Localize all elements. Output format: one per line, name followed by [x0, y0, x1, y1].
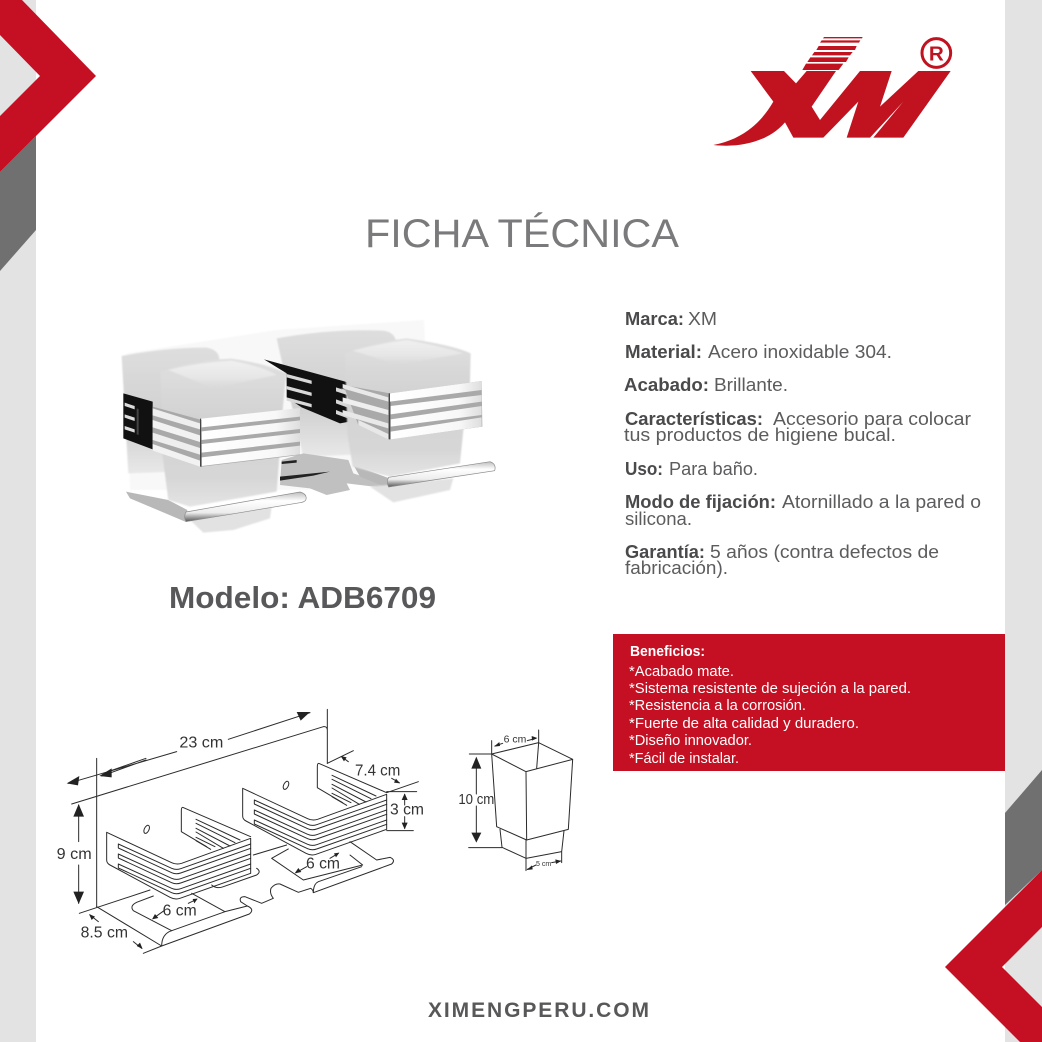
cup labels: 10 cm: [458, 792, 494, 808]
spec: garantia: fabricación).: [625, 558, 728, 578]
spec: modo de fijacion: [625, 492, 981, 529]
logo registered mark: R: [929, 42, 944, 65]
spec: marca: [625, 309, 717, 329]
cup labels: 5 cm: [536, 859, 551, 868]
dimension drawing: cup: [458, 730, 573, 871]
spec: caracteristicas: Accesorio para colocar: [773, 409, 971, 429]
dimension arrows: [68, 713, 418, 948]
spec: acabado: Acabado:: [624, 375, 709, 395]
product photo: [122, 320, 495, 533]
cup arrows: [476, 738, 561, 869]
spec: garantia: 5 años (contra defectos de: [710, 542, 939, 562]
front left cup bottom: [190, 507, 272, 533]
arrow heads: [67, 712, 408, 949]
dimension labels: 8.5 cm: [81, 925, 128, 942]
title: FICHA TÉCNICA: [365, 211, 679, 256]
left decorative strip: [0, 0, 96, 1042]
logo: XM: [713, 37, 951, 146]
benefits list: *Fuerte de alta calidad y duradero.: [629, 716, 859, 732]
cup labels: 6 cm: [504, 735, 526, 746]
logo registered mark: [922, 39, 951, 67]
spec: marca: XM: [688, 309, 717, 329]
bottom shelf: [79, 842, 393, 953]
spec: caracteristicas: tus productos de higiene bucal.: [624, 425, 896, 445]
benefits list: *Diseño innovador.: [629, 733, 752, 749]
right decorative strip: [945, 0, 1042, 1042]
spec: acabado: Brillante.: [714, 375, 788, 395]
left bands: [153, 407, 300, 467]
spec: uso: Para baño.: [669, 459, 758, 479]
benefits heading: Beneficios:: [630, 644, 705, 660]
spec: material: Acero inoxidable 304.: [708, 342, 892, 362]
benefits list: *Sistema resistente de sujeción a la pared.: [629, 681, 911, 697]
spec: caracteristicas: Características:: [625, 409, 763, 429]
dimension labels: 7.4 cm: [355, 762, 400, 779]
front left cup: [161, 359, 286, 507]
dimension labels: 9 cm: [57, 846, 92, 863]
dimension labels: 6 cm: [306, 856, 340, 873]
dimension labels: [57, 734, 424, 942]
benefits list: *Acabado mate.: [629, 664, 734, 680]
model heading: Modelo: ADB6709: [169, 580, 436, 615]
logo speed lines: [802, 37, 863, 70]
spec: material: [625, 342, 892, 362]
spec: garantia: Garantía:: [625, 542, 705, 562]
logo letters XM: [713, 71, 951, 146]
spec: modo de fijacion: Modo de fijación:: [625, 492, 776, 512]
right shelf lip: [387, 462, 495, 487]
panel: beneficios: [613, 634, 1005, 771]
benefits list: *Resistencia a la corrosión.: [629, 698, 806, 714]
spec: garantia: [625, 542, 939, 578]
left basket: [107, 807, 251, 899]
cup outline: [469, 730, 573, 871]
left black bracket: [123, 393, 153, 449]
wall plate outline: [72, 709, 327, 907]
left rear cup: [122, 348, 219, 473]
spec: material: Material:: [625, 342, 702, 362]
spec: acabado: [624, 375, 788, 395]
spec: modo de fijacion: silicona.: [625, 509, 692, 529]
dimension labels: 23 cm: [179, 734, 223, 751]
lower shelf and connector: [126, 453, 389, 522]
right rear cup: [277, 330, 396, 457]
benefits list: *Fácil de instalar.: [629, 751, 739, 767]
right basket: [243, 763, 387, 855]
right bands: [343, 381, 482, 439]
back plate: [127, 320, 425, 490]
spec: uso: [625, 459, 758, 479]
spec: caracteristicas: [624, 409, 971, 445]
front right cup: [345, 338, 471, 477]
dimension labels: 6 cm: [163, 902, 197, 919]
benefits list: [629, 664, 911, 767]
right black bracket: [264, 359, 387, 423]
specifications list: [624, 309, 981, 578]
dimension drawing: holder: [57, 709, 424, 953]
front right cup bottom: [370, 478, 453, 502]
cup arrow heads: [471, 736, 561, 870]
spec: uso: Uso:: [625, 459, 663, 479]
dimension labels: 3 cm: [390, 802, 424, 819]
cup labels: [458, 735, 551, 868]
website footer: XIMENGPERU.COM: [428, 999, 649, 1022]
spec: modo de fijacion: Atornillado a la pared o: [782, 492, 981, 512]
spec: marca: Marca:: [625, 309, 684, 329]
left shelf lip: [185, 492, 306, 522]
